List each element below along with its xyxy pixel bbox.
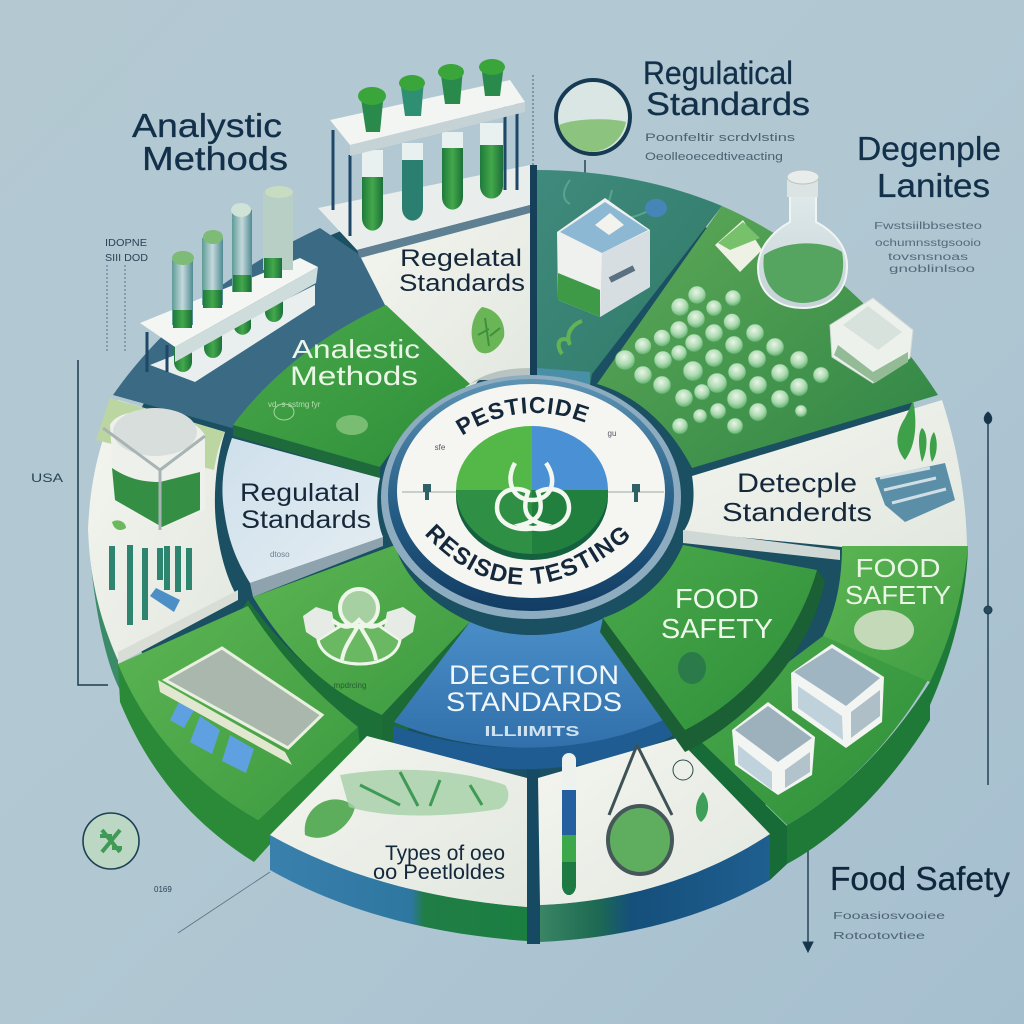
panel: right white detection sector: Detecple: [737, 468, 857, 498]
caption: biohazard sector: mpdrcing: [334, 681, 366, 690]
heading: detectable limits: Degenple: [857, 130, 1001, 167]
text: food safety caption: Rotootovtiee: [833, 930, 925, 942]
icon: leaf pattern on types sector: [305, 770, 508, 838]
heading: regulatory standards: Regulatical: [643, 55, 793, 91]
panel side: left outer rim: [88, 530, 120, 690]
panel: outer food safety green sector: [823, 546, 968, 705]
panel: outer food safety green sector: FOOD: [856, 553, 940, 583]
panel: biohazard green sector: [253, 545, 484, 748]
pie chart base: [88, 165, 968, 944]
panel: dark blue analytic back sector: [113, 228, 390, 428]
text: limits caption: [874, 221, 983, 275]
text: regulatory caption: [645, 132, 796, 163]
panel: analytic methods green sector: Methods: [290, 361, 418, 391]
panel: right white detection sector: [683, 400, 967, 560]
center hub: gu: [608, 429, 616, 438]
panel: analytic methods green sector: Analestic: [292, 334, 420, 364]
panel: regulatory standards white sector: Standards: [399, 270, 525, 297]
text: limits caption: gnoblinlsoo: [889, 264, 976, 275]
panel: lower left green sector: [118, 606, 360, 862]
panel: types of pesticides white sector: Types of oeo: [385, 842, 505, 865]
panel: inner food safety green sector: SAFETY: [661, 613, 773, 644]
hub white ring: [397, 384, 665, 598]
heading: detectable limits: Lanites: [877, 167, 990, 204]
text: regulatory caption: Oeolleoecedtiveacting: [645, 151, 783, 163]
icon: mesh tray on lower left sector: [158, 648, 322, 773]
hub title top: PESTICIDE: [455, 396, 590, 435]
panel: detection standards blue sector: STANDARDS: [446, 687, 622, 717]
heading: regulatory standards: Standards: [646, 86, 810, 122]
heading: analytic methods: Methods: [142, 140, 288, 177]
text: limits caption: ochumnsstgsooio: [875, 238, 982, 249]
heading: regulatory standards: [643, 55, 810, 122]
panel: analytic methods green sector: vd· s·sstmg fyr: [268, 400, 321, 409]
panel: light blue regulatory sector: Standards: [241, 506, 371, 534]
text: limits caption: tovsnsnoas: [888, 252, 968, 263]
icon: jar on far left sector: [103, 408, 205, 625]
hub small marks: [423, 484, 640, 502]
panel: inner food safety green sector: FOOD: [675, 583, 759, 614]
icon: container box on teal sector: [557, 198, 650, 317]
text: left labels: 0169: [154, 885, 172, 894]
center hub: [381, 375, 681, 619]
hub outer ring: [381, 375, 681, 619]
icon: biohazard on green sector: [303, 589, 416, 664]
heading: food safety: Food Safety: [830, 860, 1010, 897]
text: limits caption: Fwstsiilbbsesteo: [874, 221, 983, 232]
leader lines: [78, 75, 992, 952]
panel underlay: dark gaps between sectors: [113, 195, 943, 944]
panel: light blue regulatory sector: Regulatal: [240, 479, 360, 507]
icon: biohazard symbol: [497, 463, 569, 529]
text: left labels: USA: [31, 471, 63, 485]
panel: detection standards blue sector: ILLIIMITS: [484, 723, 580, 740]
panel: green pills sector: [597, 206, 938, 468]
panel: detection standards blue sector: [393, 618, 672, 769]
icon: bottom left circle: [83, 813, 139, 869]
text: left labels: SIII DOD: [105, 253, 148, 264]
icon: pills on green sector: [615, 286, 829, 434]
text: left labels: IDOPNE: [105, 238, 147, 249]
panel: light blue regulatory sector: [222, 438, 383, 597]
panel: regulatory standards white sector: [358, 165, 537, 392]
icon: leaf card and lid box on green sector: [715, 220, 913, 383]
text: left labels: [31, 238, 172, 894]
icon: data cubes on lower green sector: [732, 644, 884, 795]
text: regulatory caption: Poonfeltir scrdvlstins: [645, 132, 796, 144]
panel: types of pesticides white sector: [270, 736, 527, 941]
text: food safety caption: [833, 910, 945, 942]
heading: analytic methods: [132, 107, 288, 177]
center hub: sfe: [435, 443, 446, 452]
icon: plant and notebook on right white sector: [875, 400, 955, 522]
panel: analytic methods green sector: [233, 305, 470, 478]
icon: left test tube rack: [140, 186, 318, 382]
panel: types of pesticides white sector: oo Peetloldes: [373, 861, 505, 884]
icon: magnifier circle at top: [556, 80, 630, 154]
panel: right white detection sector: Standerdts: [722, 497, 872, 527]
panel: outer food safety green sector: SAFETY: [845, 580, 951, 610]
icon: probe and magnifier on lower right sector: [562, 745, 708, 895]
heading: detectable limits: [857, 130, 1001, 204]
panel: lower right green sector: [693, 636, 930, 864]
hub core disc: [456, 432, 608, 560]
panel: far left white sector: [88, 398, 238, 664]
text: food safety caption: Fooasiosvooiee: [833, 910, 945, 922]
panel: detection standards blue sector: DEGECTION: [449, 660, 619, 690]
hub title bottom: RESISDE TESTING: [425, 524, 629, 585]
panel: lower right white sector: [538, 738, 770, 942]
panel: teal regulatory sector: [537, 170, 722, 385]
heading: analytic methods: Analystic: [132, 107, 282, 144]
panel: inner food safety green sector: [600, 545, 825, 752]
panel: regulatory standards white sector: Regelatal: [400, 245, 522, 272]
icon: flask: [758, 170, 847, 308]
panel: light blue regulatory sector: dtoso: [270, 550, 290, 559]
icon: big test tube rack: [318, 59, 530, 258]
